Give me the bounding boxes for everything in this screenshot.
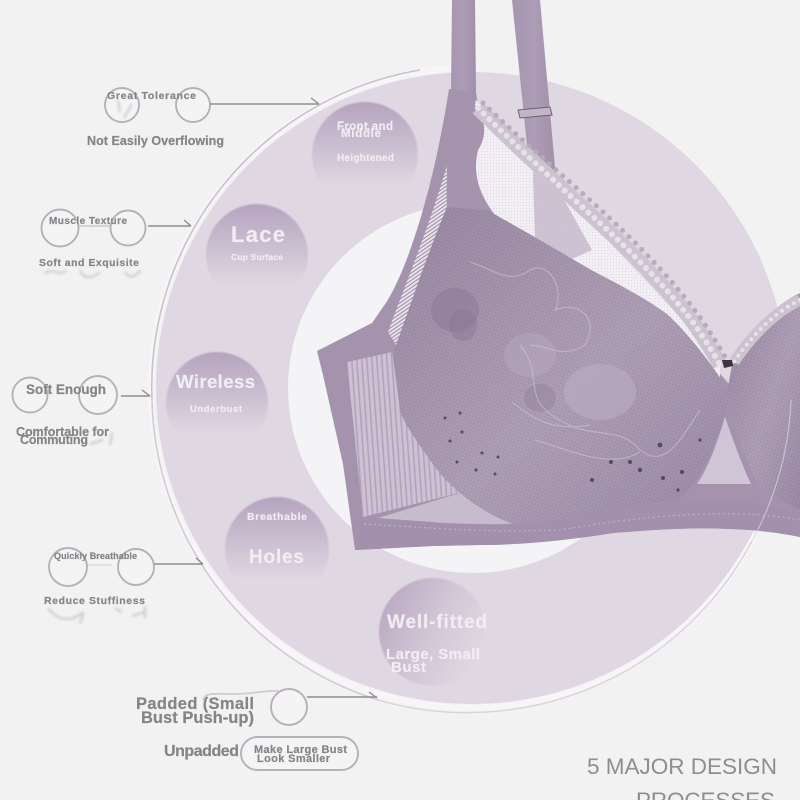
lace floral pattern	[431, 262, 700, 459]
callout: muscle texture: Soft and Exquisite	[39, 257, 139, 269]
white mesh panel behind cup	[470, 100, 720, 392]
callout: great tolerance	[87, 88, 319, 148]
callout: padded: Padded (Small	[136, 695, 254, 713]
mesh strap join	[447, 98, 495, 215]
circular ring disc	[151, 68, 788, 713]
feature ball: front and middle: Front and	[337, 121, 393, 133]
callout: soft enough: Comfortable for	[16, 425, 109, 439]
feature ball: wireless: Wireless	[176, 371, 255, 392]
callout: unpadded: Unpadded	[164, 743, 239, 760]
right strap	[512, 0, 557, 190]
callout: padded	[136, 689, 377, 727]
right cup	[727, 293, 800, 510]
feature ball: lace: Lace	[231, 222, 285, 247]
callout: unpadded: Look Smaller	[257, 753, 331, 765]
gore triangle	[697, 417, 751, 484]
right cup lace trim	[734, 300, 800, 362]
feature ball: lace: Cup Surface	[231, 252, 283, 262]
dark lace specks	[444, 412, 702, 492]
right cup mesh texture	[727, 293, 800, 510]
callout: soft enough: Commuting	[20, 433, 88, 447]
feature ball: wireless: Underbust	[190, 404, 243, 415]
cup mesh texture	[393, 207, 730, 525]
garment base silhouette	[317, 89, 800, 550]
feature ball: front and middle: Middle	[341, 128, 381, 140]
left strap	[451, 0, 476, 92]
callout: great tolerance: Great Tolerance	[107, 90, 196, 102]
title: 5 MAJOR DESIGN	[587, 754, 777, 779]
cup	[393, 207, 730, 525]
thin ring line over product	[752, 400, 791, 541]
feature ball: well-fitted: Large, Small	[386, 646, 480, 663]
callout: unpadded	[164, 737, 358, 770]
bottom band	[355, 499, 800, 550]
feature ball: holes	[225, 497, 329, 601]
feature ball: wireless	[166, 352, 268, 454]
callout: muscle texture: Muscle Texture	[49, 216, 127, 227]
callout: quickly breathable: Reduce Stuffiness	[44, 595, 145, 607]
title	[587, 754, 777, 800]
back panel stripes	[347, 352, 463, 517]
callout: unpadded: Make Large Bust	[254, 744, 347, 756]
feature ball: front and middle	[312, 102, 418, 208]
side mesh opening	[388, 165, 447, 345]
callout: muscle texture	[39, 210, 191, 277]
callout: great tolerance: Not Easily Overflowing	[87, 134, 224, 148]
light wedge under cup	[378, 492, 517, 525]
callout: quickly breathable: Quickly Breathable	[54, 551, 137, 561]
gore knot	[722, 360, 733, 368]
callout: soft enough: Soft Enough	[26, 382, 106, 397]
callout: padded: Bust Push-up)	[141, 709, 254, 727]
feature ball: well-fitted: Bust	[391, 659, 426, 676]
feature ball: well-fitted: Well-fitted	[387, 612, 487, 633]
feature ball: front and middle: Heightened	[337, 153, 394, 164]
feature ball: holes: Breathable	[247, 511, 307, 523]
product photo: lilac lace bra	[317, 0, 800, 550]
strap buckle	[518, 107, 552, 118]
feature ball: holes: Holes	[249, 547, 304, 568]
scalloped lace trim	[478, 103, 727, 365]
feature ball: well-fitted	[379, 578, 487, 686]
callout: quickly breathable	[44, 548, 203, 624]
feature ball: lace	[206, 204, 308, 306]
callout: soft enough	[12, 376, 150, 447]
